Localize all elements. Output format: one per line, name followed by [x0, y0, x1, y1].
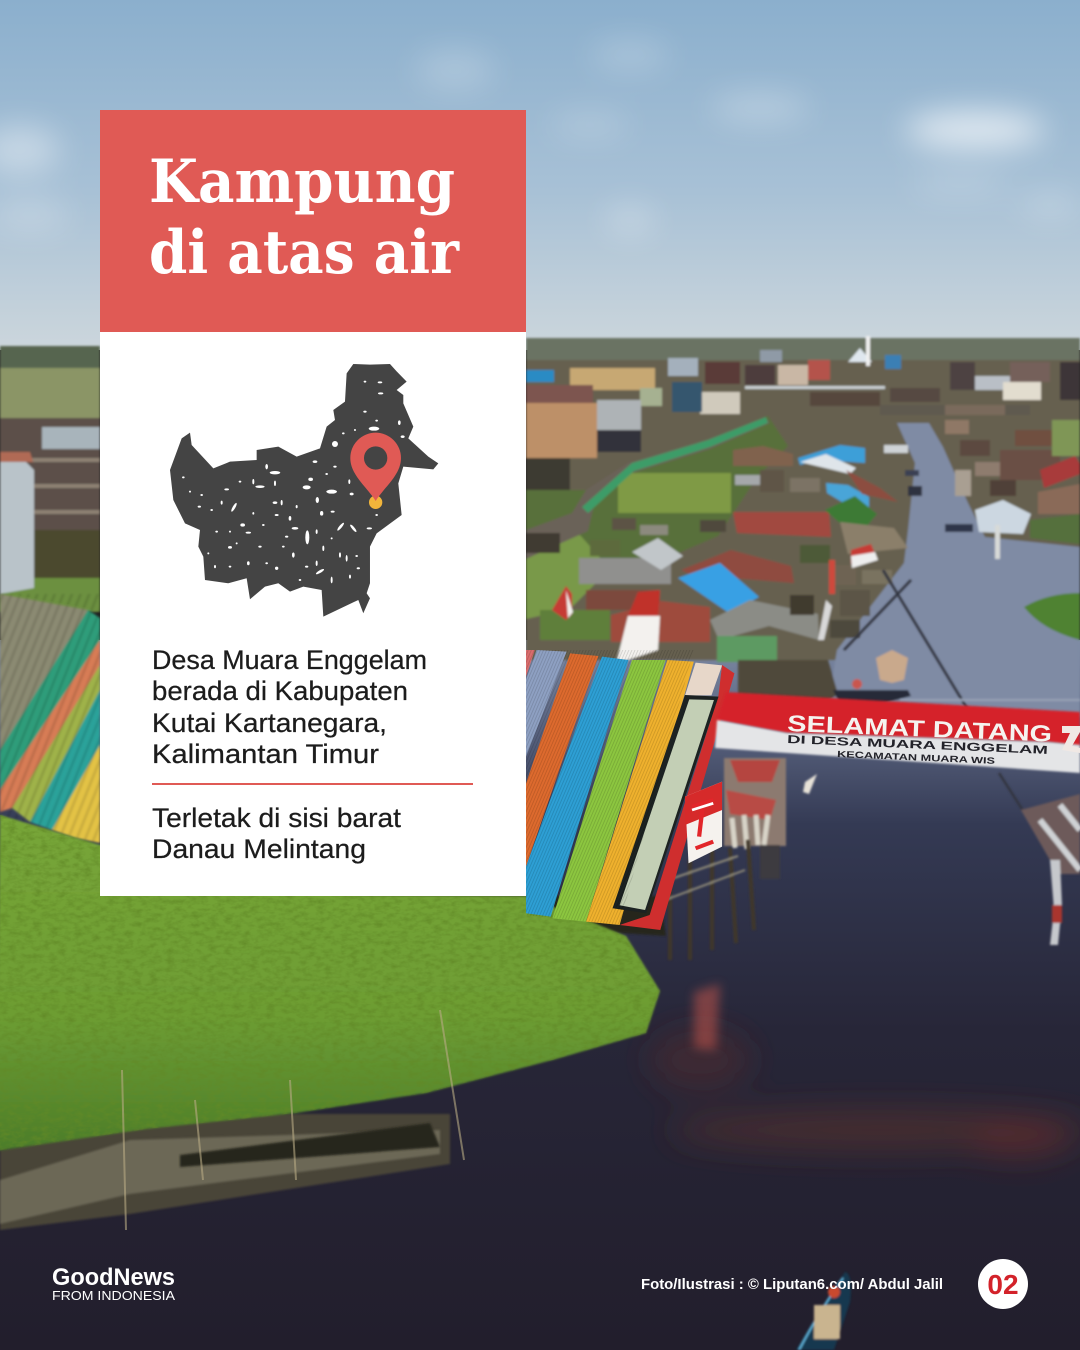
photo: small boat	[796, 1272, 851, 1350]
far town	[526, 336, 1080, 415]
photo: village on the water	[526, 336, 1080, 717]
roofs	[798, 445, 865, 465]
banner: Selamat Datang: SELAMAT DATANG	[787, 710, 1053, 747]
tall tan building	[526, 403, 597, 458]
logo: GoodNews from Indonesia	[52, 1264, 176, 1303]
text: lake position: Terletak di sisi barat	[152, 803, 402, 833]
photo: left corrugated rainbow roof	[0, 594, 100, 844]
banner: Selamat Datang: DI DESA MUARA ENGGELAM	[787, 734, 1048, 757]
card: title panel	[100, 110, 526, 332]
flags	[628, 590, 660, 616]
title: Kampung	[149, 147, 455, 217]
card: white info panel	[100, 332, 526, 896]
text: lake position	[152, 803, 402, 864]
text: location description: berada di Kabupaten	[152, 676, 408, 706]
photo credit: Foto/Ilustrasi : © Liputan6.com/ Abdul Jalil	[641, 1276, 943, 1293]
page number badge	[978, 1259, 1028, 1309]
boardwalk	[526, 417, 770, 559]
map of Kalimantan	[170, 364, 438, 617]
small houses texture	[540, 405, 1080, 640]
photo: poles and fish trap	[803, 570, 1080, 945]
photo: grass bank	[0, 810, 670, 1230]
photo: colourful corrugated roof	[526, 650, 734, 930]
river channel	[826, 423, 1080, 717]
page number badge: 02	[987, 1269, 1019, 1300]
jetty under banner	[738, 660, 838, 700]
photo: water	[0, 640, 1080, 1350]
photo: reflections below the roof	[724, 758, 786, 879]
photo: stilts under the roof	[350, 840, 754, 960]
sky background	[0, 0, 1080, 350]
text: location description: Kalimantan Timur	[152, 739, 379, 769]
banner: Selamat Datang	[715, 692, 1080, 773]
icon: location pin	[350, 433, 401, 509]
photo: red 74 sign on roof	[685, 782, 722, 863]
banner: Selamat Datang: KECAMATAN MUARA WIS	[837, 749, 995, 766]
text: location description	[152, 645, 427, 769]
text: location description: Desa Muara Enggelam	[152, 645, 427, 675]
text: location description: Kutai Kartanegara,	[152, 708, 387, 738]
title: di atas air	[149, 218, 460, 288]
logo: GoodNews from Indonesia: FROM INDONESIA	[52, 1289, 176, 1303]
logo: GoodNews from Indonesia: GoodNews	[52, 1264, 175, 1291]
photo: far left bank behind the card	[0, 346, 100, 612]
text: lake position: Danau Melintang	[152, 834, 366, 864]
title	[149, 147, 460, 288]
